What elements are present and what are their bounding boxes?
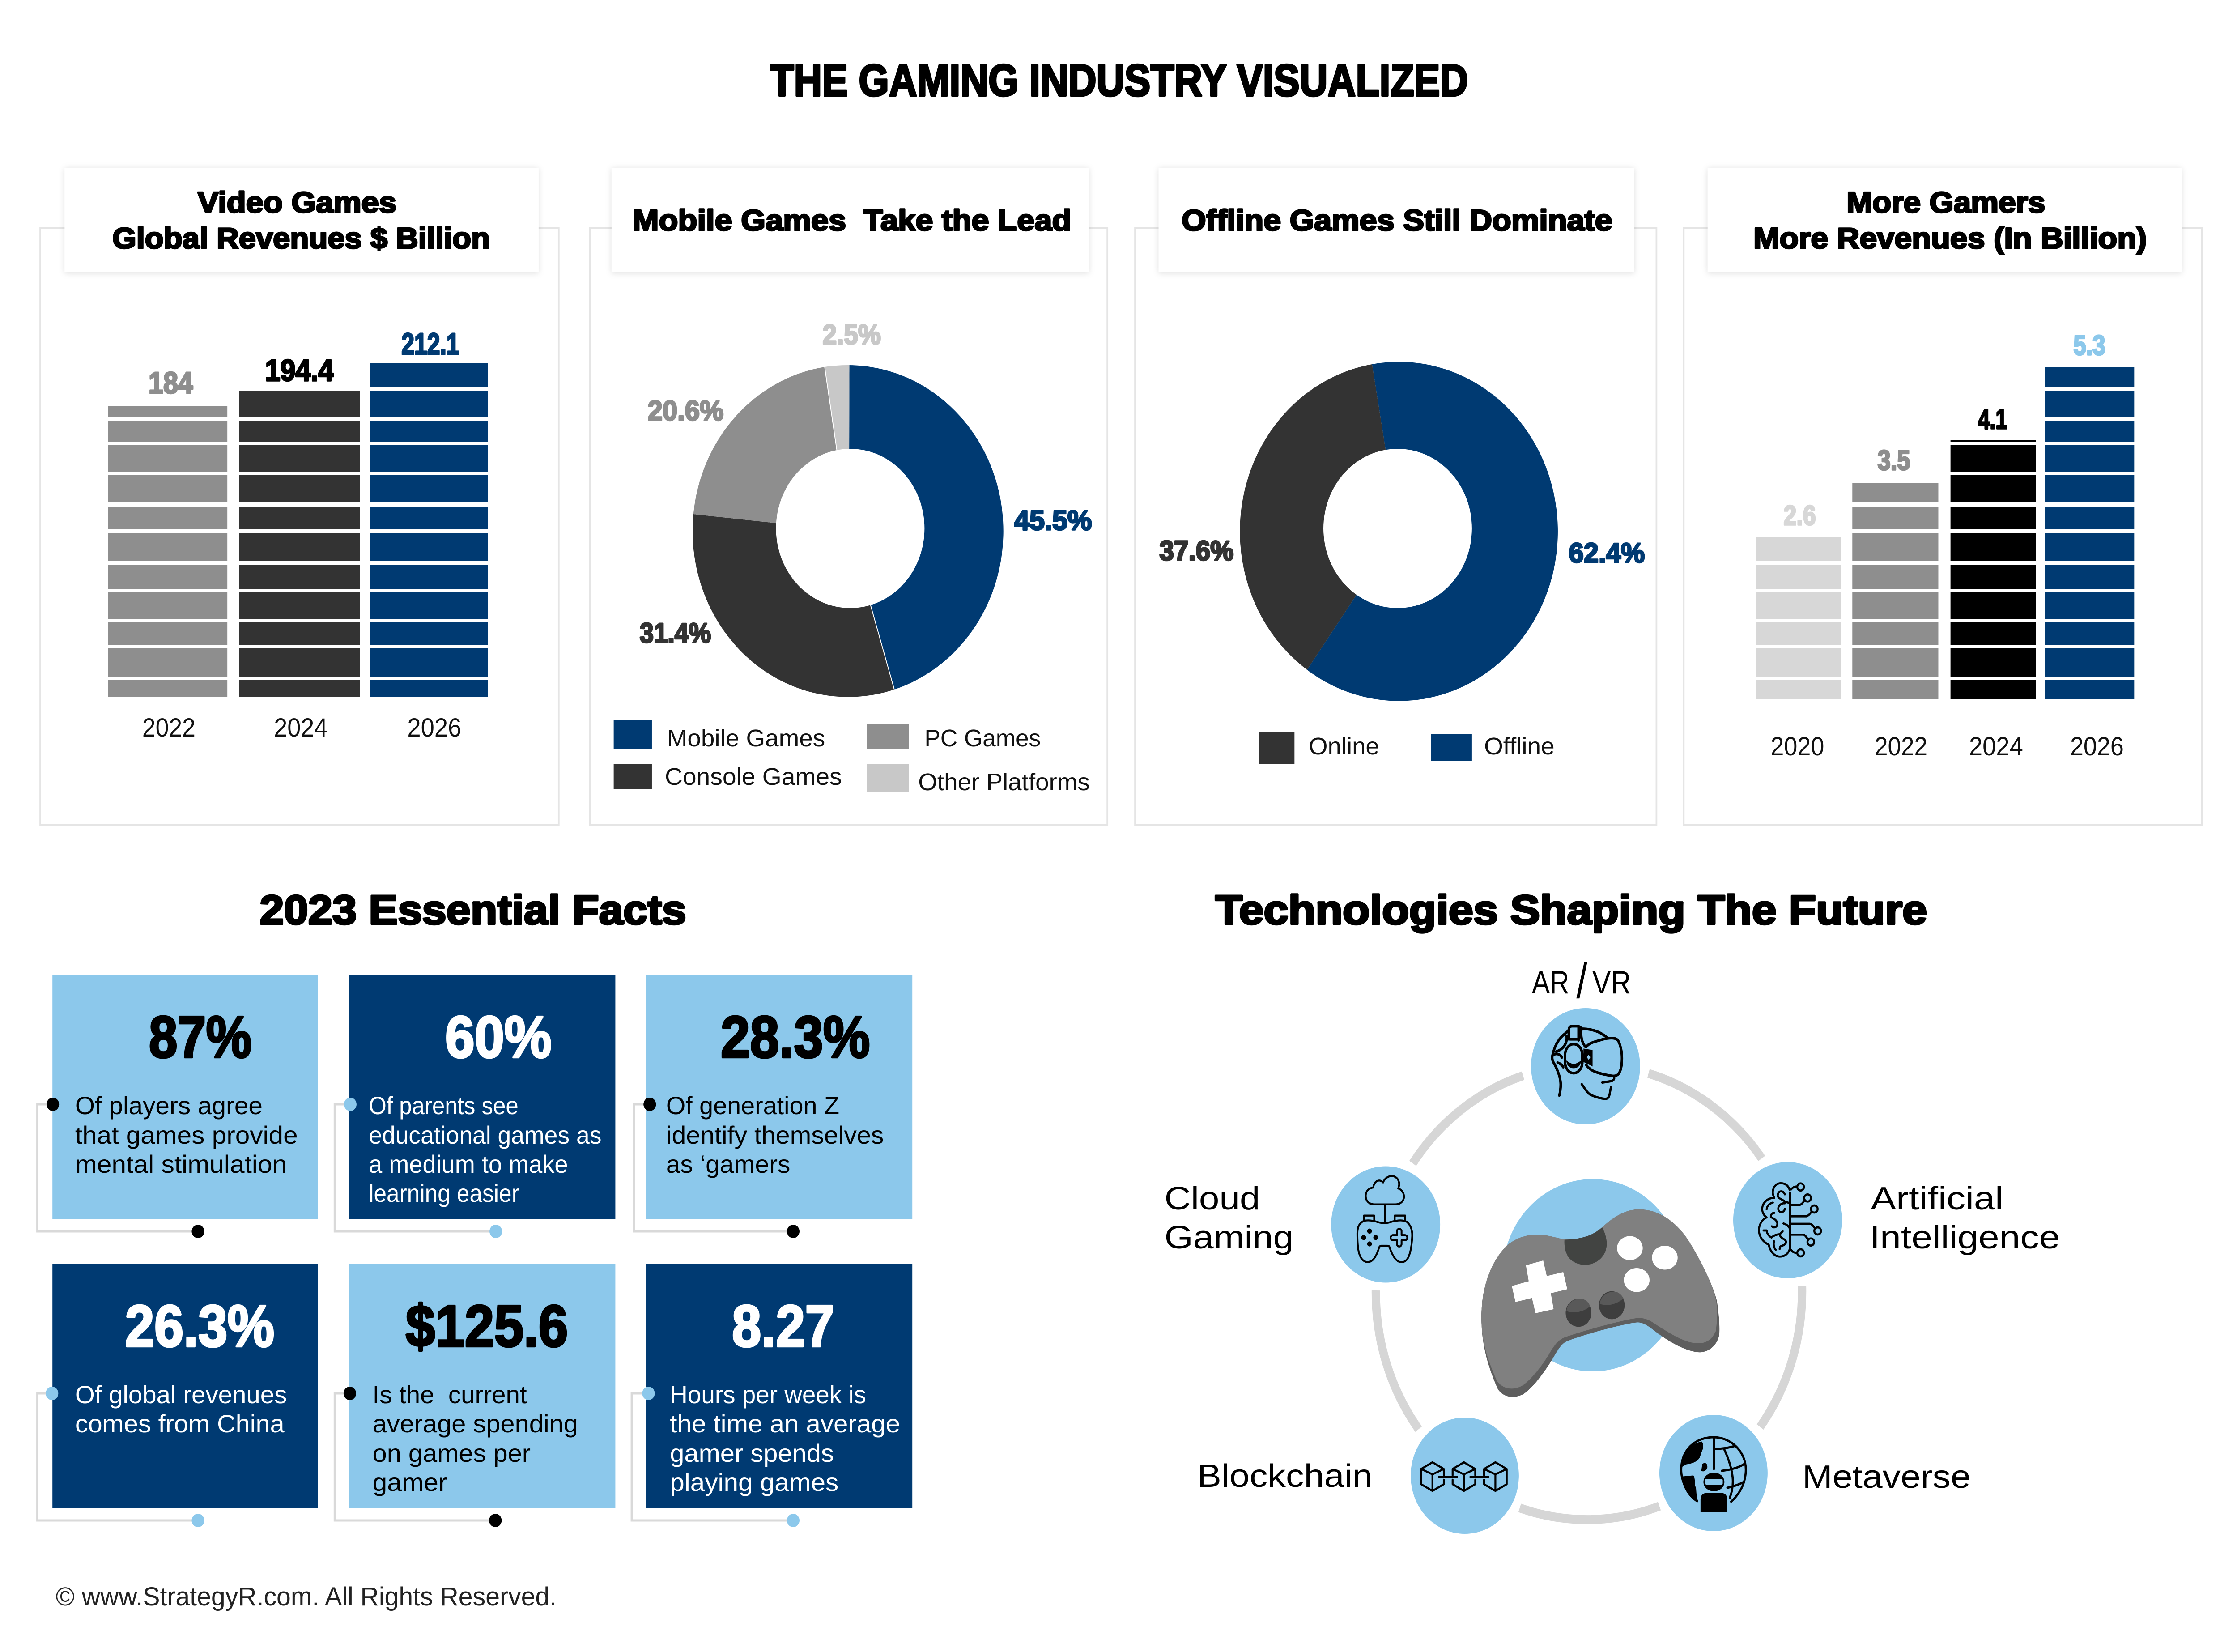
bar chart: global revenues: 212.1 [401, 327, 459, 361]
fact card: 60%: Of parents see [369, 1091, 519, 1120]
fact card: 87%: that games provide [75, 1121, 298, 1149]
panel heading: mobile games: Mobile Games Take the Lead [633, 204, 1072, 237]
fact card: $125.6: Is the current [373, 1380, 527, 1409]
donut chart: game segments [640, 319, 1092, 697]
bar chart: global revenues: 184 [149, 366, 193, 400]
label: metaverse: Metaverse [1803, 1459, 1971, 1494]
label: cloud gaming: Cloud [1165, 1180, 1260, 1216]
heading: technologies shaping the future: Technologies Shaping The Future [1215, 886, 1927, 933]
label: AR/VR [1532, 953, 1631, 1009]
fact card: 87%: Of players agree [75, 1091, 263, 1120]
fact card: 8.27: 8.27 [732, 1293, 834, 1359]
bar chart: global revenues: 194.4 [265, 353, 334, 387]
title: THE GAMING INDUSTRY VISUALIZED [770, 55, 1468, 106]
donut chart: online vs offline: 62.4% [1569, 537, 1645, 568]
fact card: 28.3%: identify themselves [666, 1121, 884, 1149]
fact card: 26.3%: comes from China [75, 1409, 285, 1438]
legend: game segments: Console Games [665, 764, 842, 790]
bar chart: gamers by year: 2022 [1875, 732, 1927, 761]
fact card: 26.3%: Of global revenues [75, 1380, 287, 1409]
label: artificial intelligence: Intelligence [1870, 1219, 2060, 1255]
panel heading: mobile games [612, 168, 1089, 272]
fact card: 60%: a medium to make [369, 1150, 568, 1178]
fact card: 28.3% [634, 975, 912, 1238]
label: AR/VR: / [1576, 953, 1587, 1009]
label: cloud gaming: Gaming [1165, 1219, 1293, 1255]
icon: cloud gaming controller [1331, 1166, 1440, 1282]
panel heading: more gamers [1708, 168, 2182, 272]
bar chart: gamers by year: 2024 [1969, 732, 2023, 761]
icon: metaverse globe [1659, 1415, 1768, 1531]
fact card: 60%: learning easier [369, 1179, 519, 1207]
fact card: 60%: 60% [445, 1004, 552, 1070]
panel: more gamers more revenues [1684, 168, 2202, 825]
panel: offline games still dominate [1135, 168, 1656, 825]
bar chart: gamers by year [1753, 330, 2137, 761]
donut chart: game segments: 20.6% [648, 395, 723, 426]
fact card: 8.27: playing games [670, 1468, 838, 1496]
fact card: 60%: educational games as [369, 1121, 601, 1149]
donut chart: game segments: 45.5% [1014, 505, 1092, 536]
panel heading: more gamers: More Gamers [1846, 186, 2046, 219]
label: cloud gaming [1165, 1180, 1293, 1255]
legend: online vs offline [1259, 732, 1555, 764]
fact card: $125.6 [335, 1264, 615, 1527]
central game controller illustration [1481, 1179, 1719, 1397]
bar chart: global revenues: 2024 [274, 713, 327, 742]
bar chart: gamers by year: 4.1 [1978, 404, 2007, 434]
fact card: 26.3% [37, 1264, 318, 1527]
fact card: 8.27: gamer spends [670, 1439, 834, 1467]
donut chart: online vs offline [1159, 362, 1645, 701]
fact card: 87%: mental stimulation [75, 1150, 287, 1178]
donut chart: online vs offline: 37.6% [1159, 535, 1233, 566]
bar chart: gamers by year: 3.5 [1878, 445, 1910, 476]
legend: online vs offline: Offline [1484, 733, 1555, 760]
fact card: 28.3%: Of generation Z [666, 1091, 839, 1120]
legend: game segments: Mobile Games [667, 725, 825, 752]
panel heading: video games: Video Games [198, 186, 396, 219]
bar chart: gamers by year: 5.3 [2073, 330, 2105, 361]
copyright note: © www.StrategyR.com. All Rights Reserved. [56, 1582, 557, 1611]
label: artificial intelligence: Artificial [1871, 1180, 2003, 1216]
panel: mobile games take the lead [590, 168, 1107, 825]
panel: video games global revenues [40, 168, 559, 825]
label: AR/VR: VR [1592, 964, 1631, 1000]
label: blockchain: Blockchain [1197, 1458, 1373, 1494]
icon: AI brain [1733, 1162, 1842, 1278]
bar chart: global revenues [105, 327, 491, 742]
panel heading: video games: Global Revenues $ Billion [112, 221, 490, 255]
panel heading: offline games: Offline Games Still Dominate [1182, 204, 1612, 237]
bar chart: global revenues: 2022 [142, 713, 196, 742]
legend: game segments: Other Platforms [918, 769, 1090, 796]
legend: game segments: PC Games [924, 725, 1041, 752]
heading: 2023 essential facts: 2023 Essential Facts [259, 886, 686, 933]
fact card: 87%: 87% [149, 1004, 252, 1070]
label: AR/VR: AR [1532, 964, 1569, 1000]
fact card: 28.3%: 28.3% [721, 1004, 870, 1070]
panel heading: offline games [1159, 168, 1634, 272]
fact card: 8.27: Hours per week is [670, 1380, 866, 1409]
fact card: 60% [335, 975, 615, 1238]
fact card: 87% [37, 975, 318, 1238]
fact card: $125.6: on games per [373, 1439, 531, 1467]
fact card: 8.27: the time an average [670, 1409, 900, 1438]
bar chart: global revenues: 2026 [407, 713, 461, 742]
icon: blockchain cubes [1411, 1418, 1519, 1534]
legend: game segments [614, 720, 1090, 796]
donut chart: game segments: 2.5% [823, 319, 881, 350]
bar chart: gamers by year: 2020 [1770, 732, 1824, 761]
fact card: $125.6: $125.6 [406, 1293, 568, 1359]
panel heading: more gamers: More Revenues (In Billion) [1753, 221, 2147, 255]
fact card: 26.3%: 26.3% [125, 1293, 274, 1359]
bar chart: gamers by year: 2026 [2070, 732, 2124, 761]
fact card: 28.3%: as ‘gamers [666, 1150, 790, 1178]
icon: VR headset [1531, 1008, 1640, 1124]
label: artificial intelligence [1870, 1180, 2060, 1255]
fact card: $125.6: gamer [373, 1468, 447, 1496]
legend: online vs offline: Online [1309, 733, 1379, 760]
fact card: 8.27 [632, 1264, 912, 1527]
bar chart: gamers by year: 2.6 [1783, 500, 1816, 531]
donut chart: game segments: 31.4% [640, 617, 711, 648]
ring connecting technologies [1376, 1073, 1802, 1520]
panel heading: video games [64, 168, 539, 272]
fact card: $125.6: average spending [373, 1409, 578, 1438]
